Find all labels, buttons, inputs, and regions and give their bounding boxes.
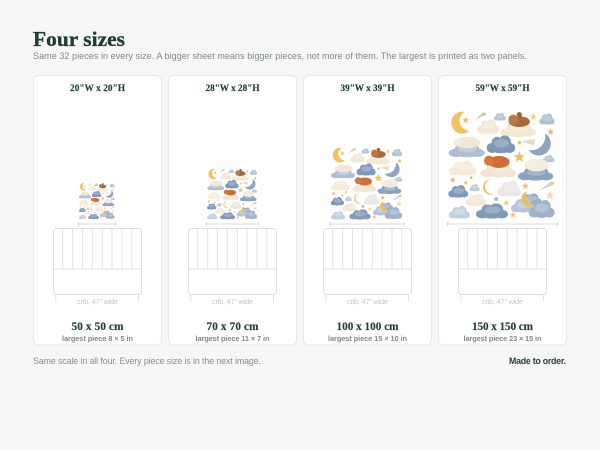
panel: 20 inch size <box>34 76 162 345</box>
footnote: Same scale in all four. Every piece size is in the next image. <box>33 356 261 366</box>
subtitle: Same 32 pieces in every size. A bigger sheet means bigger pieces, not more of them. The largest is printed as two panels. <box>33 51 527 61</box>
largest piece: largest piece 8 × 5 in <box>62 334 133 343</box>
crib caption: crib, 47" wide <box>347 297 388 306</box>
crib caption: crib, 47" wide <box>77 297 118 306</box>
icon: crib <box>458 228 546 302</box>
largest piece: largest piece 23 × 15 in <box>464 334 542 343</box>
width ruler <box>447 222 558 226</box>
artwork: 100 cm sheet <box>331 148 402 220</box>
panel: 28 inch size <box>168 76 296 345</box>
icon: crib <box>54 228 142 302</box>
heading: 20 inch: 20"W x 20"H <box>70 83 125 93</box>
width ruler <box>330 222 404 226</box>
crib caption: crib, 47" wide <box>212 297 253 306</box>
heading: 59 inch: 59"W x 59"H <box>476 83 530 93</box>
artwork: 50 cm sheet <box>79 183 115 219</box>
heading: 39 inch: 39"W x 39"H <box>340 83 394 93</box>
title: Four sizes <box>33 27 125 51</box>
crib caption: crib, 47" wide <box>482 297 523 306</box>
made to order note: Made to order. <box>509 356 566 366</box>
artwork: 150 cm sheet <box>448 112 555 219</box>
panel: 59 inch size <box>438 76 566 345</box>
panel: 39 inch size <box>304 76 432 345</box>
artwork: 70 cm sheet <box>207 169 257 219</box>
width ruler <box>78 222 116 226</box>
icon: crib <box>324 228 412 302</box>
heading: 28 inch: 28"W x 28"H <box>206 83 260 93</box>
size in cm: 70 x 70 cm <box>206 321 259 333</box>
size in cm: 150 x 150 cm <box>472 321 534 333</box>
width ruler <box>206 222 258 226</box>
icon: crib <box>188 228 276 302</box>
largest piece: largest piece 15 × 10 in <box>328 334 407 343</box>
largest piece: largest piece 11 × 7 in <box>196 334 270 343</box>
size in cm: 100 x 100 cm <box>336 321 399 333</box>
size in cm: 50 x 50 cm <box>72 321 124 333</box>
